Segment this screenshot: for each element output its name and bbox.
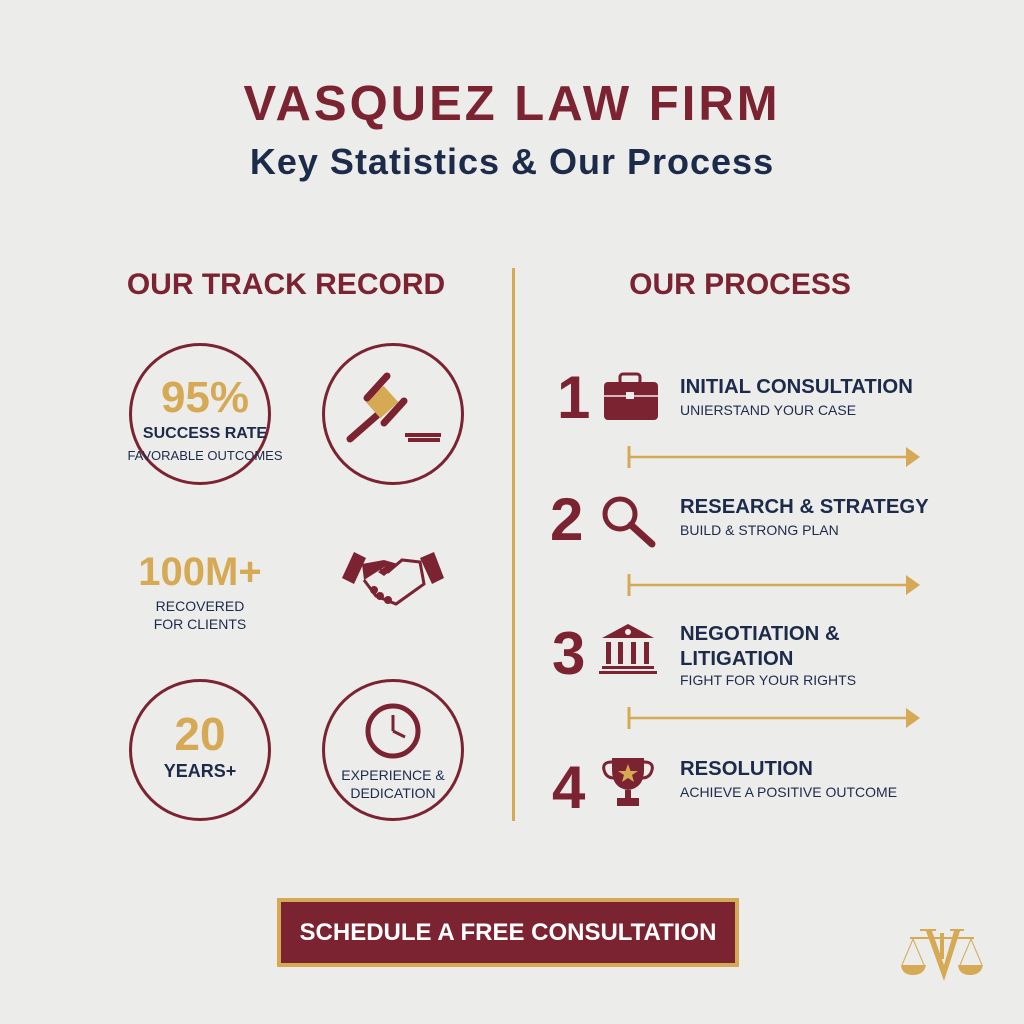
arrow 2	[628, 574, 920, 596]
step 4: RESOLUTION	[680, 758, 813, 780]
icon: handshake	[342, 552, 444, 606]
step 4: ACHIEVE A POSITIVE OUTCOME	[680, 784, 897, 800]
step 3: LITIGATION	[680, 648, 793, 670]
step 1: 1	[557, 364, 590, 431]
step 3: NEGOTIATION &	[680, 623, 840, 645]
button: schedule consultation	[277, 898, 739, 967]
stat: 95%	[127, 343, 283, 485]
step 1: UNIERSTAND YOUR CASE	[680, 402, 856, 418]
button: schedule consultation: SCHEDULE A FREE CONSULTATION	[300, 919, 716, 946]
stat: 20 years: YEARS+	[164, 761, 236, 781]
heading: track record: OUR TRACK RECORD	[127, 268, 445, 301]
step 2: RESEARCH & STRATEGY	[680, 496, 929, 518]
logo: scales V	[901, 929, 983, 981]
arrow 1	[628, 446, 920, 468]
step 3: FIGHT FOR YOUR RIGHTS	[680, 672, 856, 688]
step 4: 4	[552, 754, 585, 821]
icon: clock circle	[322, 679, 464, 821]
step 1: INITIAL CONSULTATION	[680, 376, 913, 398]
stat: 100M+: FOR CLIENTS	[154, 616, 246, 632]
icon: clock circle: DEDICATION	[350, 785, 436, 801]
step 3: 3	[552, 620, 585, 687]
stat: 95%: 95%	[161, 373, 249, 422]
divider	[512, 268, 515, 821]
stat: 95%: SUCCESS RATE	[143, 425, 267, 442]
step 3	[552, 620, 856, 688]
stat: 100M+: 100M+	[138, 550, 262, 594]
step 2	[550, 486, 929, 553]
step 1	[557, 364, 913, 431]
step 2: BUILD & STRONG PLAN	[680, 522, 839, 538]
icon: clock circle: EXPERIENCE &	[341, 767, 445, 783]
stat: 95%: FAVORABLE OUTCOMES	[127, 448, 283, 463]
title: VASQUEZ LAW FIRM	[243, 77, 781, 131]
step 4	[552, 754, 897, 821]
arrow 3	[628, 707, 920, 729]
stat: 100M+: RECOVERED	[156, 598, 244, 614]
subtitle: Key Statistics & Our Process	[250, 141, 774, 182]
heading: process: OUR PROCESS	[629, 268, 851, 301]
stat: 20 years	[129, 679, 271, 821]
step 2: 2	[550, 486, 583, 553]
icon: gavel circle	[322, 343, 464, 485]
stat: 100M+	[138, 550, 262, 632]
stat: 20 years: 20	[174, 708, 226, 760]
